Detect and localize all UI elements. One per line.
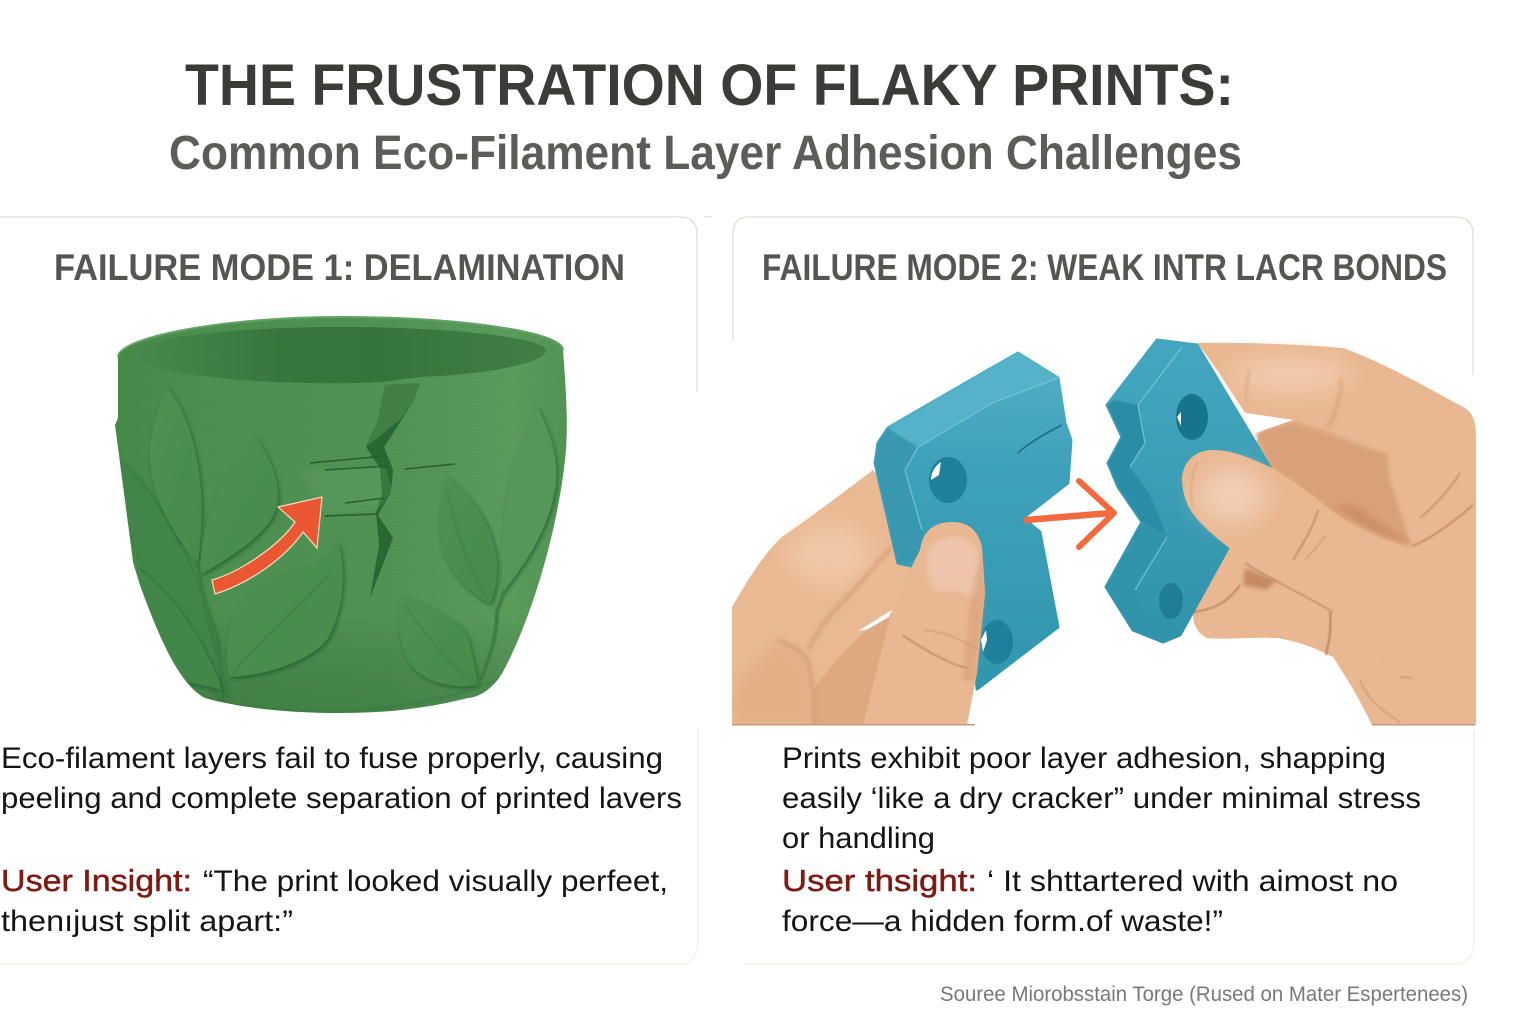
right blue piece xyxy=(1106,340,1270,642)
thumb highlight xyxy=(1198,467,1266,523)
piece shape xyxy=(1106,340,1270,642)
palm highlight xyxy=(790,525,870,585)
left palm xyxy=(732,470,915,725)
thumb crease xyxy=(902,635,968,668)
palm deep shade xyxy=(1335,505,1412,546)
red arrow on pot xyxy=(212,497,322,594)
panel: failure mode 1 xyxy=(0,217,698,964)
quote line 1: ‘ It shttartered with aimost no xyxy=(987,865,1398,898)
panel 1 frame xyxy=(0,217,697,392)
gap arrow xyxy=(1026,481,1114,547)
leaf lower xyxy=(227,542,343,677)
small divider tick xyxy=(704,216,712,218)
description text 1 xyxy=(1,742,682,815)
hole 2 light xyxy=(981,630,987,652)
title line 1: THE FRUSTRATION OF FLAKY PRINTS: xyxy=(185,53,1234,118)
panel 2 frame xyxy=(733,217,1473,375)
lower palm shading xyxy=(734,646,809,722)
shifted crack face xyxy=(367,383,420,446)
quote line 2: thenıjust split apart:” xyxy=(1,905,293,938)
thumb shape xyxy=(863,522,985,725)
insight label: User Insight: xyxy=(1,863,192,898)
white gap xyxy=(1245,413,1293,433)
top bevel xyxy=(889,383,1038,446)
line 1: Eco-filament layers fail to fuse properly, causing xyxy=(1,742,663,775)
index knuckle crease xyxy=(1328,378,1341,428)
image bottom edge right xyxy=(1372,724,1475,726)
line 1: Prints exhibit poor layer adhesion, shapping xyxy=(782,742,1386,775)
thumb crease 2 xyxy=(925,630,975,648)
knuckle fold xyxy=(778,640,813,725)
dark side edge xyxy=(876,429,917,502)
thumb nail xyxy=(927,537,980,600)
slit crack xyxy=(1018,425,1062,453)
panel: failure mode 2 xyxy=(732,217,1476,964)
thumb nail edge xyxy=(1191,462,1198,508)
line 2: easily ‘like a dry cracker” under minimal stress xyxy=(782,782,1421,815)
arrow head xyxy=(1079,481,1114,547)
base line xyxy=(205,678,500,711)
pot opening xyxy=(134,327,546,383)
palm lines xyxy=(1360,657,1455,722)
hole 1 light xyxy=(931,462,941,480)
hole R2 xyxy=(1159,583,1183,619)
hole 1 xyxy=(929,457,967,503)
leaf vein lower xyxy=(232,575,330,675)
leaf centre left xyxy=(200,435,278,575)
subtitle: Common Eco-Filament Layer Adhesion Challenges xyxy=(169,127,1242,180)
dark notched side xyxy=(1107,400,1167,537)
hole R1 xyxy=(1176,394,1208,440)
finger highlight xyxy=(1230,357,1350,393)
finger knuckle mark xyxy=(1420,473,1460,518)
quote line 2: force—a hidden form.of waste!” xyxy=(782,905,1223,938)
line 2: peeling and complete separation of printed lavers xyxy=(1,782,682,815)
arrow shaft xyxy=(1026,513,1111,520)
quote line 1: “The print looked visually perfeet, xyxy=(203,865,668,898)
hole R1 light xyxy=(1177,412,1181,426)
pot body xyxy=(115,317,567,713)
horizontal delamination cracks xyxy=(310,456,455,516)
right thumb xyxy=(1182,450,1476,720)
left thumb xyxy=(863,522,985,725)
panel 1 lower frame xyxy=(0,728,698,964)
folded finger fold xyxy=(1412,505,1473,546)
shaded fingers xyxy=(813,610,892,725)
thumb side shade xyxy=(962,555,985,680)
image bottom edge xyxy=(732,724,975,726)
rim highlight xyxy=(118,317,563,357)
thumb crease xyxy=(1293,510,1318,560)
leaf bottom right xyxy=(399,597,477,686)
right hand xyxy=(1193,343,1476,725)
piece side and face xyxy=(875,353,1071,689)
finger nail crease xyxy=(1246,370,1250,402)
heading: failure mode 1: FAILURE MODE 1: DELAMINATION xyxy=(54,247,625,288)
title xyxy=(169,53,1242,180)
left side leaves xyxy=(113,455,222,700)
left hand xyxy=(732,470,915,725)
stem right xyxy=(477,590,505,688)
image: hands snapping blue part xyxy=(732,340,1476,725)
leaf bottom vein xyxy=(405,606,458,668)
description text 2 xyxy=(782,742,1421,855)
thumb underside xyxy=(1245,563,1333,612)
insight label: User thsight: xyxy=(782,863,977,898)
peeled band xyxy=(376,468,392,510)
finger fold xyxy=(808,547,892,650)
lower finger shade xyxy=(1243,568,1277,590)
left blue piece xyxy=(875,353,1071,689)
palm crease xyxy=(1326,612,1331,655)
hole 2 xyxy=(981,620,1013,664)
source note: Souree Miorobsstain Torge (Rused on Mater Espertenees) xyxy=(940,983,1468,1006)
leaf upper left xyxy=(150,387,202,565)
leaf mid vein xyxy=(446,490,481,587)
user insight 1 xyxy=(1,863,668,938)
bevel highlight xyxy=(905,378,1058,530)
user insight 2 xyxy=(782,863,1398,938)
pot surface detail xyxy=(120,383,560,713)
leaf right mid xyxy=(439,477,497,604)
white gap 2 xyxy=(870,690,885,706)
line 3: or handling xyxy=(782,822,935,855)
thumb shape xyxy=(1182,450,1476,720)
interior lines xyxy=(134,327,546,383)
hand shape xyxy=(1193,343,1476,725)
panel 2 lower frame xyxy=(745,730,1474,964)
lower finger fold xyxy=(1193,585,1240,612)
crease highlights xyxy=(1130,347,1182,590)
stem left xyxy=(197,560,230,700)
palm shade xyxy=(1255,422,1411,545)
image: cracked green leaf pot xyxy=(110,315,570,715)
lower side xyxy=(1106,522,1167,642)
thumb crease 2 xyxy=(1305,535,1326,560)
crack fissure xyxy=(366,383,420,598)
white gap 1 xyxy=(858,610,892,631)
lower left leaf xyxy=(133,565,222,690)
leaf right tall xyxy=(502,407,556,592)
